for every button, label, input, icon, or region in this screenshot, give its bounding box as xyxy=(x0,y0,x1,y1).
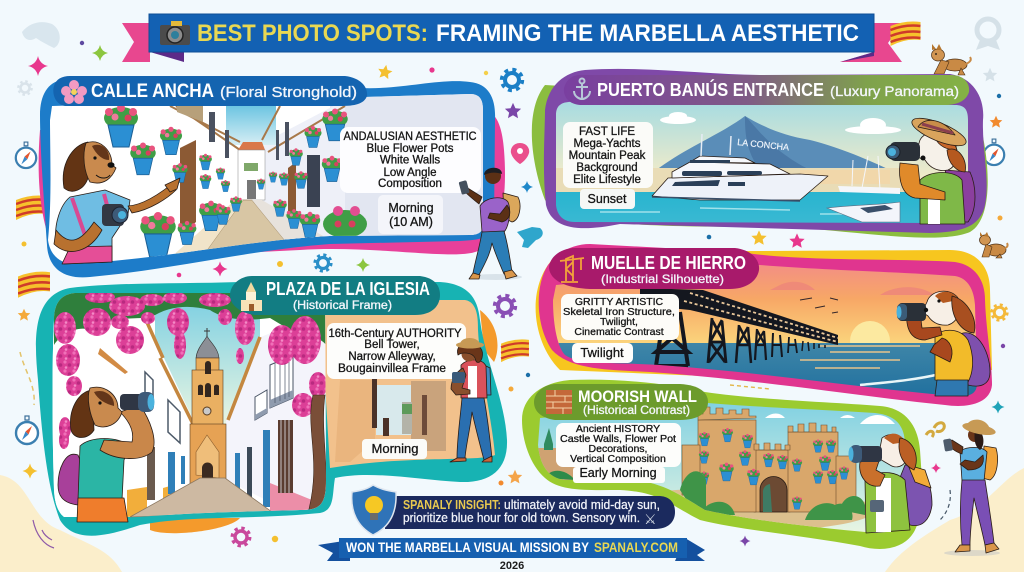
dog photographer pointing xyxy=(54,142,180,264)
text box: fast life: FAST LIFE xyxy=(579,126,635,138)
insight text line 1: ultimately avoid mid-day sun, xyxy=(504,498,660,512)
text box: aesthetic: Composition xyxy=(378,178,442,190)
text box: twilight xyxy=(572,343,633,363)
header: MOORISH WALL xyxy=(578,388,697,406)
text box: aesthetic: Low Angle xyxy=(383,167,437,179)
text box: ancient history: Vertical Composition xyxy=(570,453,666,465)
insight text line 2: prioritize blue hour for old town. Sensory win. xyxy=(403,511,640,525)
panel: Muelle de Hierro xyxy=(536,244,992,406)
header xyxy=(534,384,708,420)
header: CALLE ANCHA xyxy=(91,80,214,102)
text box: morning xyxy=(362,439,427,459)
insight text line 1 xyxy=(403,498,660,512)
footer tail left xyxy=(318,540,350,561)
header xyxy=(549,248,759,289)
castle scene xyxy=(535,400,910,540)
footer bar xyxy=(339,538,687,558)
person with hat xyxy=(450,338,492,462)
text box: fast life: Mega-Yachts xyxy=(574,138,641,150)
teal frame xyxy=(36,282,507,536)
dog with hat and camera xyxy=(886,113,975,224)
insight text line 1: SPANALY INSIGHT: xyxy=(403,498,501,512)
bushes xyxy=(680,471,865,520)
marina boats xyxy=(838,186,900,194)
harbor scene xyxy=(550,100,975,224)
text box: gritty artistic: Twilight, xyxy=(600,316,638,328)
footer text white: WON THE MARBELLA VISUAL MISSION BY xyxy=(346,540,589,555)
panel: Puerto Banús xyxy=(532,69,988,238)
side buildings xyxy=(50,320,198,517)
icon: crane xyxy=(560,256,584,282)
text box: twilight: Twilight xyxy=(580,345,624,360)
dog with backpack xyxy=(896,291,990,396)
woman with phone xyxy=(943,420,1000,556)
header xyxy=(53,76,367,106)
sand corner bottom right xyxy=(885,468,1024,572)
icon: flower xyxy=(61,80,87,104)
pink underlay xyxy=(39,113,505,262)
pink frame xyxy=(539,244,992,406)
icon: church xyxy=(241,282,262,311)
text box: morning: Morning xyxy=(372,441,418,456)
paved street xyxy=(130,478,272,517)
header xyxy=(230,276,440,315)
person with phone xyxy=(459,168,522,280)
balconies and doors xyxy=(98,348,312,517)
castle pots xyxy=(699,428,849,509)
church tower xyxy=(190,328,226,486)
yacht xyxy=(652,134,828,201)
alley scene xyxy=(50,290,330,517)
title text yellow: BEST PHOTO SPOTS: xyxy=(197,20,428,47)
title banner xyxy=(122,14,920,62)
yellow underlay xyxy=(536,250,992,380)
bougainvillea xyxy=(54,291,330,449)
text box: authority: Narrow Alleyway, xyxy=(348,351,436,363)
footer banner xyxy=(318,538,705,561)
text box: fast life xyxy=(563,122,653,188)
tree trunk xyxy=(308,395,326,513)
small dog top right xyxy=(932,44,971,75)
text box: aesthetic: Blue Flower Pots xyxy=(367,143,454,155)
dog with camera xyxy=(58,387,154,522)
insight callout xyxy=(352,485,675,535)
text box: ancient history: Ancient HISTORY xyxy=(576,423,660,435)
header: PLAZA DE LA IGLESIA xyxy=(266,279,430,299)
title ribbon left xyxy=(122,23,150,62)
label: La Concha: LA CONCHA xyxy=(737,137,790,152)
text box: time: (10 AM) xyxy=(389,215,433,229)
footer text yellow: SPANALY.COM xyxy=(594,540,678,555)
header: (Luxury Panorama) xyxy=(830,84,959,99)
flower pots xyxy=(104,104,348,257)
flower bush xyxy=(323,210,367,238)
iron pier xyxy=(640,288,838,366)
header: (Industrial Silhouette) xyxy=(601,272,724,286)
sunset scene xyxy=(550,262,980,399)
blue frame xyxy=(40,80,495,277)
header: (Historical Contrast) xyxy=(583,405,690,417)
peach side panel xyxy=(320,300,495,468)
alley inset xyxy=(335,378,446,462)
text box: authority: 16th-Century AUTHORITY xyxy=(328,328,462,340)
text box: fast life: Background xyxy=(576,162,638,174)
text box: sunset: Sunset xyxy=(588,192,627,206)
flag on ribbon xyxy=(890,22,920,46)
text box: authority: Bougainvillea Frame xyxy=(338,363,446,375)
title ribbon folds xyxy=(150,52,874,62)
text box: ancient history: Decorations, xyxy=(589,443,647,455)
header: MUELLE DE HIERRO xyxy=(591,253,746,273)
text box: early morning: Early Morning xyxy=(579,466,657,480)
year: 2026 xyxy=(500,560,524,572)
text box: aesthetic xyxy=(340,127,481,193)
header: PUERTO BANÚS ENTRANCE xyxy=(597,79,824,100)
text box: time: Morning xyxy=(388,201,434,215)
text box: gritty artistic: Skeletal Iron Structure, xyxy=(563,306,675,318)
text box: time xyxy=(378,195,443,234)
text box: early morning xyxy=(573,466,665,483)
title bar xyxy=(149,14,874,52)
purple frame xyxy=(544,69,987,233)
text box: gritty artistic: Cinematic Contrast xyxy=(574,326,664,338)
insight pill xyxy=(385,496,675,529)
title ribbon right xyxy=(840,23,902,62)
header: (Historical Frame) xyxy=(293,300,392,312)
green underlay xyxy=(532,85,988,238)
icon: shield with bulb xyxy=(352,485,396,535)
small dog lower right xyxy=(980,232,1008,258)
header: (Floral Stronghold) xyxy=(220,85,357,101)
title text white: FRAMING THE MARBELLA AESTHETIC xyxy=(436,20,859,47)
panel: Plaza de la Iglesia xyxy=(36,276,507,536)
icon: brick wall xyxy=(546,390,572,414)
orange underlays xyxy=(150,310,497,533)
icon: crossed swords: ⚔ xyxy=(644,511,657,527)
text box: authority xyxy=(327,323,466,379)
text box: fast life: Elite Lifestyle xyxy=(573,174,641,186)
icon: anchor xyxy=(574,78,590,99)
text box: ancient history: Castle Walls, Flower Pot xyxy=(560,433,676,445)
text box: gritty artistic: GRITTY ARTISTIC xyxy=(575,296,664,308)
footer tail right xyxy=(675,538,705,561)
text box: fast life: Mountain Peak xyxy=(569,150,646,162)
text box: authority: Bell Tower, xyxy=(364,339,420,351)
castle walls xyxy=(682,420,856,512)
panel: Moorish Wall xyxy=(522,380,932,549)
text box: aesthetic: White Walls xyxy=(380,154,440,166)
text box: gritty artistic xyxy=(561,294,679,340)
text box: sunset xyxy=(580,189,635,209)
text box: aesthetic: ANDALUSIAN AESTHETIC xyxy=(344,131,476,143)
street scene xyxy=(45,90,490,270)
text box: ancient history xyxy=(556,423,681,467)
green frame xyxy=(522,380,922,549)
icon: camera xyxy=(160,21,190,45)
sand corner bottom left xyxy=(0,475,122,572)
panel: Calle Ancha xyxy=(39,76,522,280)
dog with camera xyxy=(848,434,932,533)
header xyxy=(564,75,969,105)
